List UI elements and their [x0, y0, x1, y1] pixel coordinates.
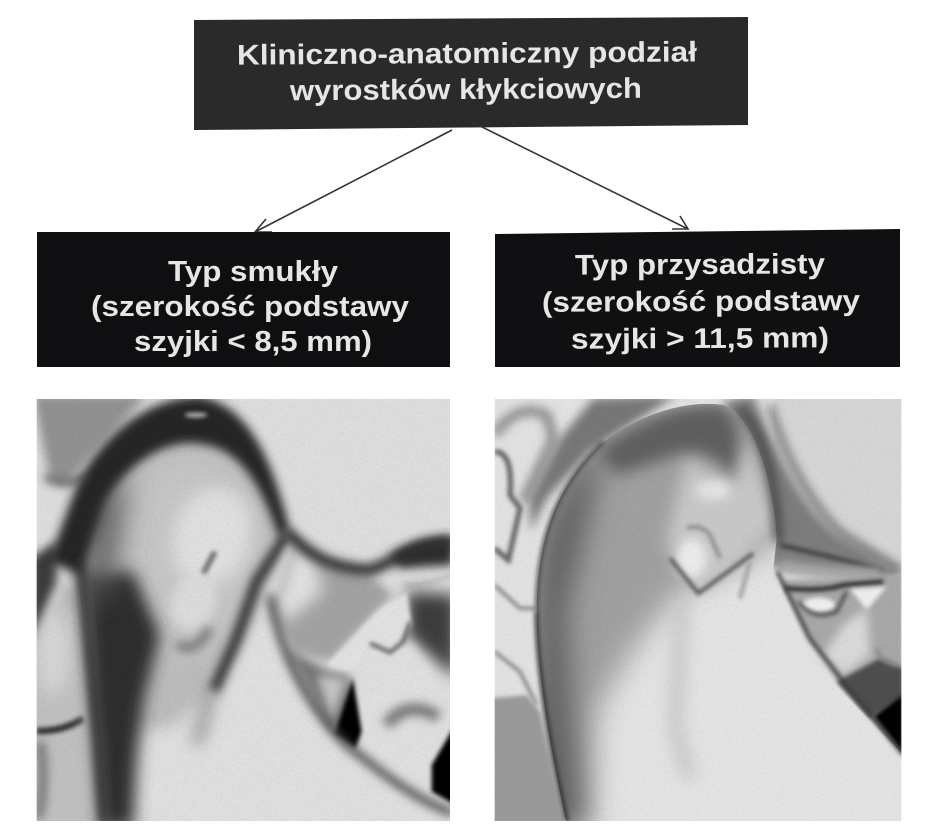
left structures: [490, 395, 677, 825]
box: stocky type: Typ przysadzisty: [575, 248, 825, 282]
box: slender type: [37, 232, 450, 367]
image: slender condylar process: [30, 395, 460, 828]
title box: [194, 17, 748, 130]
condyle body shading: [80, 418, 287, 828]
arrow: to slender type: [255, 130, 452, 232]
box: slender type: szyjki < 8,5 mm): [134, 326, 372, 358]
paper grain: [495, 399, 901, 821]
image: stocky condylar process: [490, 395, 923, 828]
condyle body: [536, 404, 901, 821]
left structures: [36, 538, 99, 821]
box: stocky type: [495, 229, 900, 367]
box: stocky type: (szerokość podstawy: [542, 285, 860, 319]
upper right light area: [773, 399, 901, 566]
condyle edges: [537, 442, 603, 612]
lower light bone: [130, 602, 460, 828]
lower right structures: [287, 592, 457, 805]
right band and fossa: [723, 395, 903, 755]
mandible lower edge: [270, 595, 453, 813]
upper left block: [33, 395, 147, 482]
condyle dark outline: [48, 397, 290, 575]
title box: Kliniczno-anatomiczny podział: [237, 36, 697, 72]
box: slender type: (szerokość podstawy: [91, 291, 409, 323]
box: stocky type: szyjki > 11,5 mm): [571, 322, 829, 356]
arrow: to stocky type: [472, 122, 688, 229]
right fossa: [273, 542, 393, 662]
title box: wyrostków kłykciowych: [289, 73, 642, 107]
box: slender type: Typ smukły: [168, 256, 338, 288]
paper grain: [37, 399, 450, 821]
